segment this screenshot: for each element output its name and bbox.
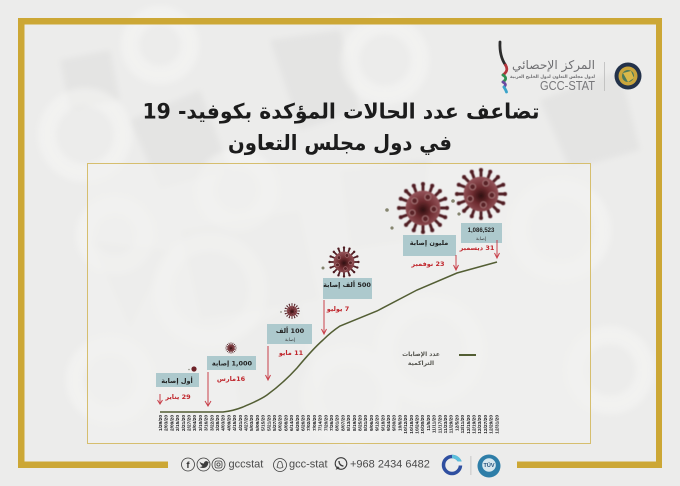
- callout: 1,000 cases: 1,000 إصابة: [212, 360, 253, 368]
- badge: blue G mark: [444, 456, 463, 474]
- date axis: 12/5/20: [454, 415, 460, 431]
- date axis: 8/07/20: [340, 415, 346, 431]
- GCC emblem: [614, 62, 642, 90]
- date axis: 6/26/20: [300, 415, 306, 431]
- date axis: 5/09/20: [255, 415, 261, 431]
- date axis: 4/21/20: [238, 415, 244, 431]
- footer contacts: [182, 458, 430, 472]
- date axis: 12/11/20: [460, 415, 466, 433]
- date axis: 9/24/20: [386, 415, 392, 431]
- date axis: 2/21/20: [181, 415, 187, 431]
- callout: 100 thousand cases: إصابة: [285, 338, 295, 343]
- date axis: 12/19/20: [472, 415, 478, 434]
- date axis: 8/19/20: [352, 415, 358, 431]
- date axis: 10/6/20: [397, 415, 403, 431]
- date axis: 4/09/20: [226, 415, 232, 431]
- date axis: 2/09/20: [169, 415, 175, 431]
- callout: first case: 29 يناير: [164, 393, 191, 401]
- callout: first case: أول إصابة: [161, 376, 193, 385]
- date axis: 9/30/20: [392, 415, 398, 431]
- date axis: [158, 415, 500, 434]
- date axis: 11/17/20: [437, 415, 443, 433]
- title: تضاعف عدد الحالات المؤكدة بكوفيد- 19: [142, 100, 540, 124]
- callout: 500 thousand cases: [322, 248, 372, 334]
- date axis: 9/12/20: [375, 415, 381, 431]
- callout: 100 thousand cases: 100 ألف: [276, 326, 305, 335]
- date axis: 4/03/20: [221, 415, 227, 431]
- date axis: 10/18/20: [409, 415, 415, 434]
- chart panel: [88, 164, 590, 444]
- callout: one million cases: 23 نوفمبر: [410, 260, 445, 268]
- certification badges: [444, 454, 500, 478]
- date axis: 7/14/20: [318, 415, 324, 431]
- callout: 100 thousand cases: [266, 304, 312, 380]
- date axis: 2/27/20: [186, 415, 192, 431]
- date axis: 3/28/20: [215, 415, 221, 431]
- title: [142, 100, 540, 155]
- callout: one million cases: [385, 184, 458, 270]
- date axis: 12/23/20: [477, 415, 483, 434]
- footer contacts: +968 2434 6482: [350, 458, 430, 470]
- callout: 1,086,523 cases: 31 ديسمبر: [459, 244, 495, 252]
- date axis: 6/08/20: [283, 415, 289, 431]
- callout: 1,000 cases: 16مارس: [217, 375, 246, 383]
- date axis: 8/13/20: [346, 415, 352, 431]
- date axis: 7/02/20: [306, 415, 312, 431]
- date axis: 9/18/20: [380, 415, 386, 431]
- date axis: 8/01/20: [335, 415, 341, 431]
- callout: one million cases: مليون إصابة: [410, 239, 448, 247]
- date axis: 10/30/20: [420, 415, 426, 434]
- date axis: 2/03/20: [164, 415, 170, 431]
- date axis: 4/15/20: [232, 415, 238, 431]
- date axis: 2/15/20: [175, 415, 181, 431]
- footer contacts: f: [186, 460, 190, 471]
- date axis: 6/20/20: [295, 415, 301, 431]
- date axis: 4/27/20: [244, 415, 250, 431]
- date axis: 12/15/20: [466, 415, 472, 434]
- logo text: المركز الإحصائي: [512, 58, 595, 73]
- date axis: 10/24/20: [414, 415, 420, 434]
- date axis: 11/29/20: [449, 415, 455, 433]
- date axis: 7/26/20: [329, 415, 335, 431]
- date axis: 10/12/20: [403, 415, 409, 434]
- logo: GCC-STAT: لدول مجلس التعاون لدول الخليج العربية: [510, 75, 595, 80]
- date axis: 6/14/20: [289, 415, 295, 431]
- callout: 1,000 cases: [205, 343, 256, 406]
- legend: التراكمية: [408, 360, 434, 367]
- footer contacts: gcc-stat: [289, 458, 328, 470]
- date axis: 3/10/20: [198, 415, 204, 431]
- social icons: [182, 458, 347, 472]
- date axis: 5/27/20: [272, 415, 278, 431]
- logo: GCC-STAT: [500, 42, 642, 93]
- date axis: 1/29/20: [158, 415, 164, 431]
- date axis: 11/5/20: [426, 415, 432, 431]
- logo ribbon: [500, 42, 507, 92]
- date axis: 11/11/20: [432, 415, 438, 433]
- date axis: 12/27/20: [483, 415, 489, 434]
- date axis: 7/20/20: [323, 415, 329, 431]
- date axis: 12/29/20: [489, 415, 495, 434]
- date axis: 5/03/20: [249, 415, 255, 431]
- date axis: 5/15/20: [261, 415, 267, 431]
- badge: TUV: TÜV: [484, 462, 495, 469]
- callout: first case: [156, 366, 199, 404]
- date axis: 9/06/20: [369, 415, 375, 431]
- callout: 500 thousand cases: 500 ألف إصابة: [323, 280, 371, 289]
- date axis: 3/22/20: [209, 415, 215, 431]
- logo: GCC-STAT: GCC-STAT: [540, 79, 595, 93]
- callout: 500 thousand cases: 7 يوليو: [326, 305, 349, 313]
- date axis: 8/31/20: [363, 415, 369, 431]
- date axis: 3/16/20: [204, 415, 210, 431]
- date axis: 12/31/20: [494, 415, 500, 434]
- legend: عدد الإصابات: [402, 351, 440, 358]
- line chart: cumulative cases: [160, 262, 497, 412]
- date axis: 3/04/20: [192, 415, 198, 431]
- date axis: 11/23/20: [443, 415, 449, 433]
- date axis: 5/21/20: [266, 415, 272, 431]
- callout: 1,086,523 cases: إصابة: [476, 237, 486, 242]
- callout: 1,086,523 cases: 1,086,523: [468, 228, 495, 234]
- footer contacts: gccstat: [228, 458, 263, 470]
- legend: [402, 351, 476, 367]
- callout: 1,086,523 cases: [451, 170, 505, 258]
- date axis: 7/08/20: [312, 415, 318, 431]
- date axis: 6/02/20: [278, 415, 284, 431]
- callout: 100 thousand cases: 11 مايو: [278, 349, 304, 357]
- title: في دول مجلس التعاون: [228, 131, 452, 155]
- date axis: 8/25/20: [358, 415, 364, 431]
